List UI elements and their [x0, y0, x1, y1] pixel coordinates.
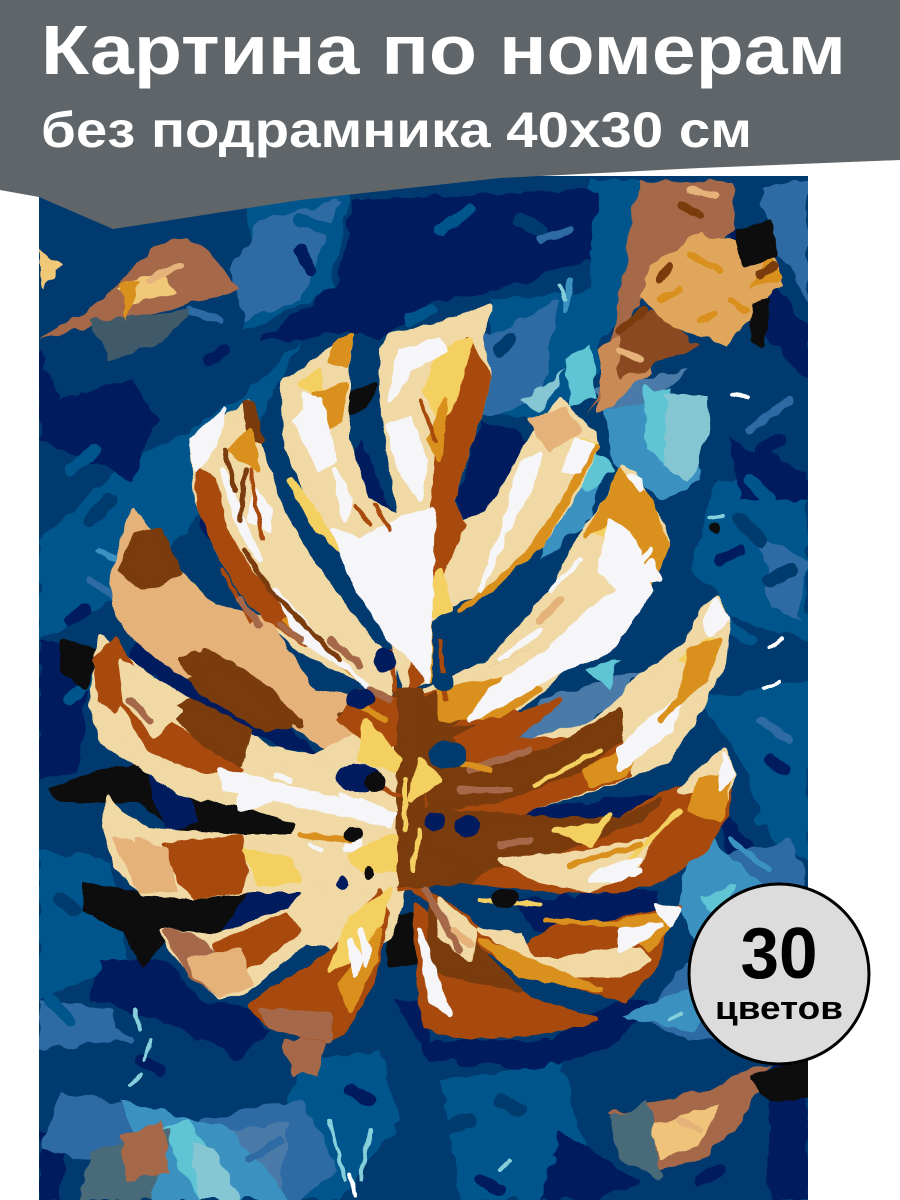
- badge: 30 colours: 30: [740, 914, 818, 994]
- badge: 30 colours: цветов: [715, 990, 843, 1026]
- painting: golden monstera leaf on blue background: [39, 176, 808, 1200]
- leaf: cream and gold highlights: [110, 335, 732, 1015]
- leaf: fine streaks: [130, 400, 690, 975]
- subtitle: без подрамника 40х30 см: [41, 102, 752, 158]
- badge: 30 colours: [689, 884, 869, 1064]
- banner: grey header shape: [0, 0, 900, 229]
- leaf: holes: [335, 648, 519, 907]
- leaf: lobes base: [92, 306, 733, 1040]
- leaf: brown midrib and shadows: [95, 340, 660, 1040]
- background: orange paint patches: [39, 180, 782, 1200]
- background: black paint patches: [50, 222, 808, 1100]
- title: Картина по номерам: [41, 11, 846, 89]
- background: blue paint patches: [39, 180, 808, 1200]
- background: brush dabs: [50, 210, 790, 1195]
